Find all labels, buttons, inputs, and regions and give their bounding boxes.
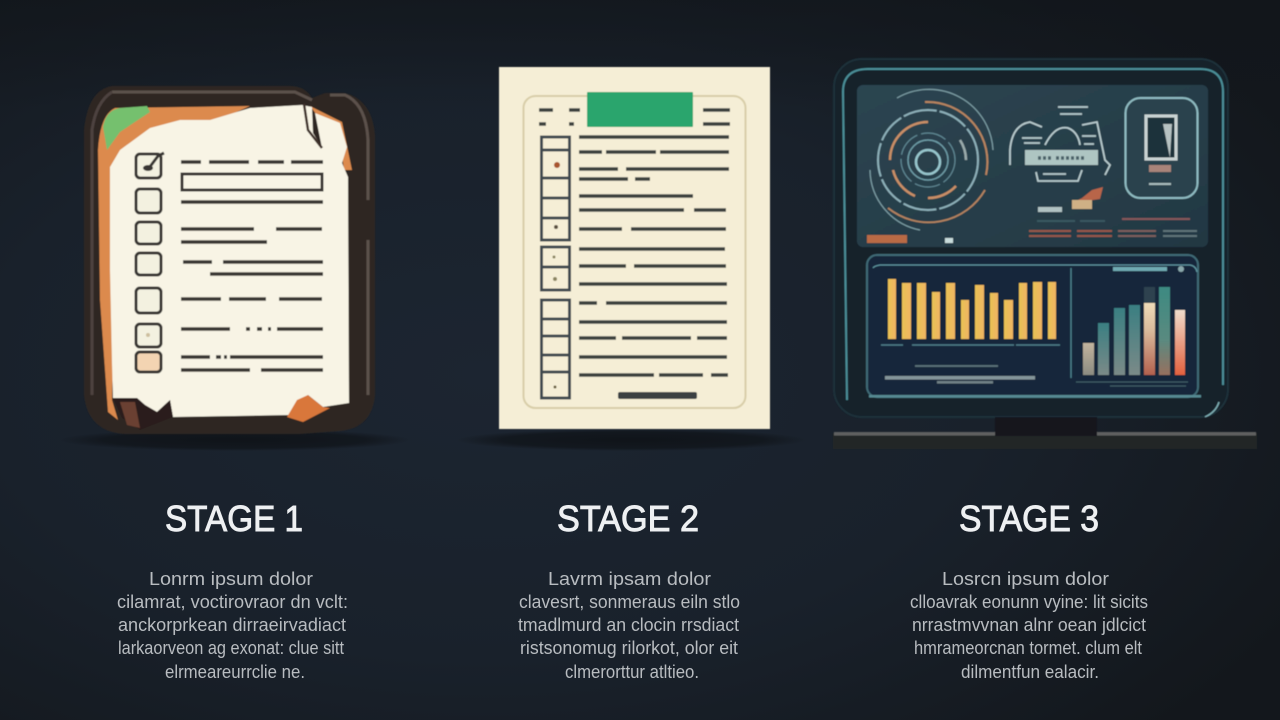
stage 3 text [910,498,1148,682]
stage 1 text [117,498,348,682]
yellow bar chart [888,279,1056,339]
text lines [579,137,729,152]
description: nrrastmvvnan alnr oean jdlcict [912,615,1146,635]
description: anckorprkean dirraeirvadiact [118,615,346,635]
checkboxes [136,154,161,372]
description: Lonrm ipsum dolor [149,569,313,589]
icon: stage 3 laptop dashboard [833,59,1257,449]
icon: stage 1 torn checklist [84,86,375,434]
central emblem [1010,107,1110,181]
footer bar [618,392,697,399]
icon: stage 2 form document [499,67,770,429]
green header [587,92,693,127]
description: elrmeareurrclie ne. [165,662,305,682]
orange edge [98,106,250,420]
description: hmrameorcnan tormet. clum elt [914,638,1142,658]
description [117,569,348,682]
description: clloavrak eonunn vyine: lit sicits [910,592,1148,612]
laptop base [833,433,1257,449]
description [518,569,740,682]
heading: STAGE 1 [165,498,303,539]
teal bar chart [1083,343,1094,375]
description: tmadlmurd an clocin rrsdiact [518,615,739,635]
heading: STAGE 2 [557,498,699,539]
lower chart panel [867,255,1198,397]
description: larkaorveon ag exonat: clue sitt [118,638,344,658]
description: dilmentfun ealacir. [961,662,1099,682]
stage 2 text [518,498,740,682]
checklist lines [181,162,323,370]
emblem label [1025,150,1098,165]
description: cilamrat, voctirovraor dn vclt: [117,592,348,612]
description: clavesrt, sonmeraus eiln stlo [519,592,740,612]
description: clmerorttur atltieo. [565,662,699,682]
side card [1126,98,1198,198]
radial gauge [870,89,993,230]
description: Losrcn ipsum dolor [942,569,1109,589]
form column boxes [541,137,570,398]
description: Lavrm ipsam dolor [548,569,711,589]
description: ristsonomug rilorkot, olor eit [520,638,738,658]
heading: STAGE 3 [959,498,1099,539]
description [910,569,1148,682]
screen footer strips [867,235,907,243]
